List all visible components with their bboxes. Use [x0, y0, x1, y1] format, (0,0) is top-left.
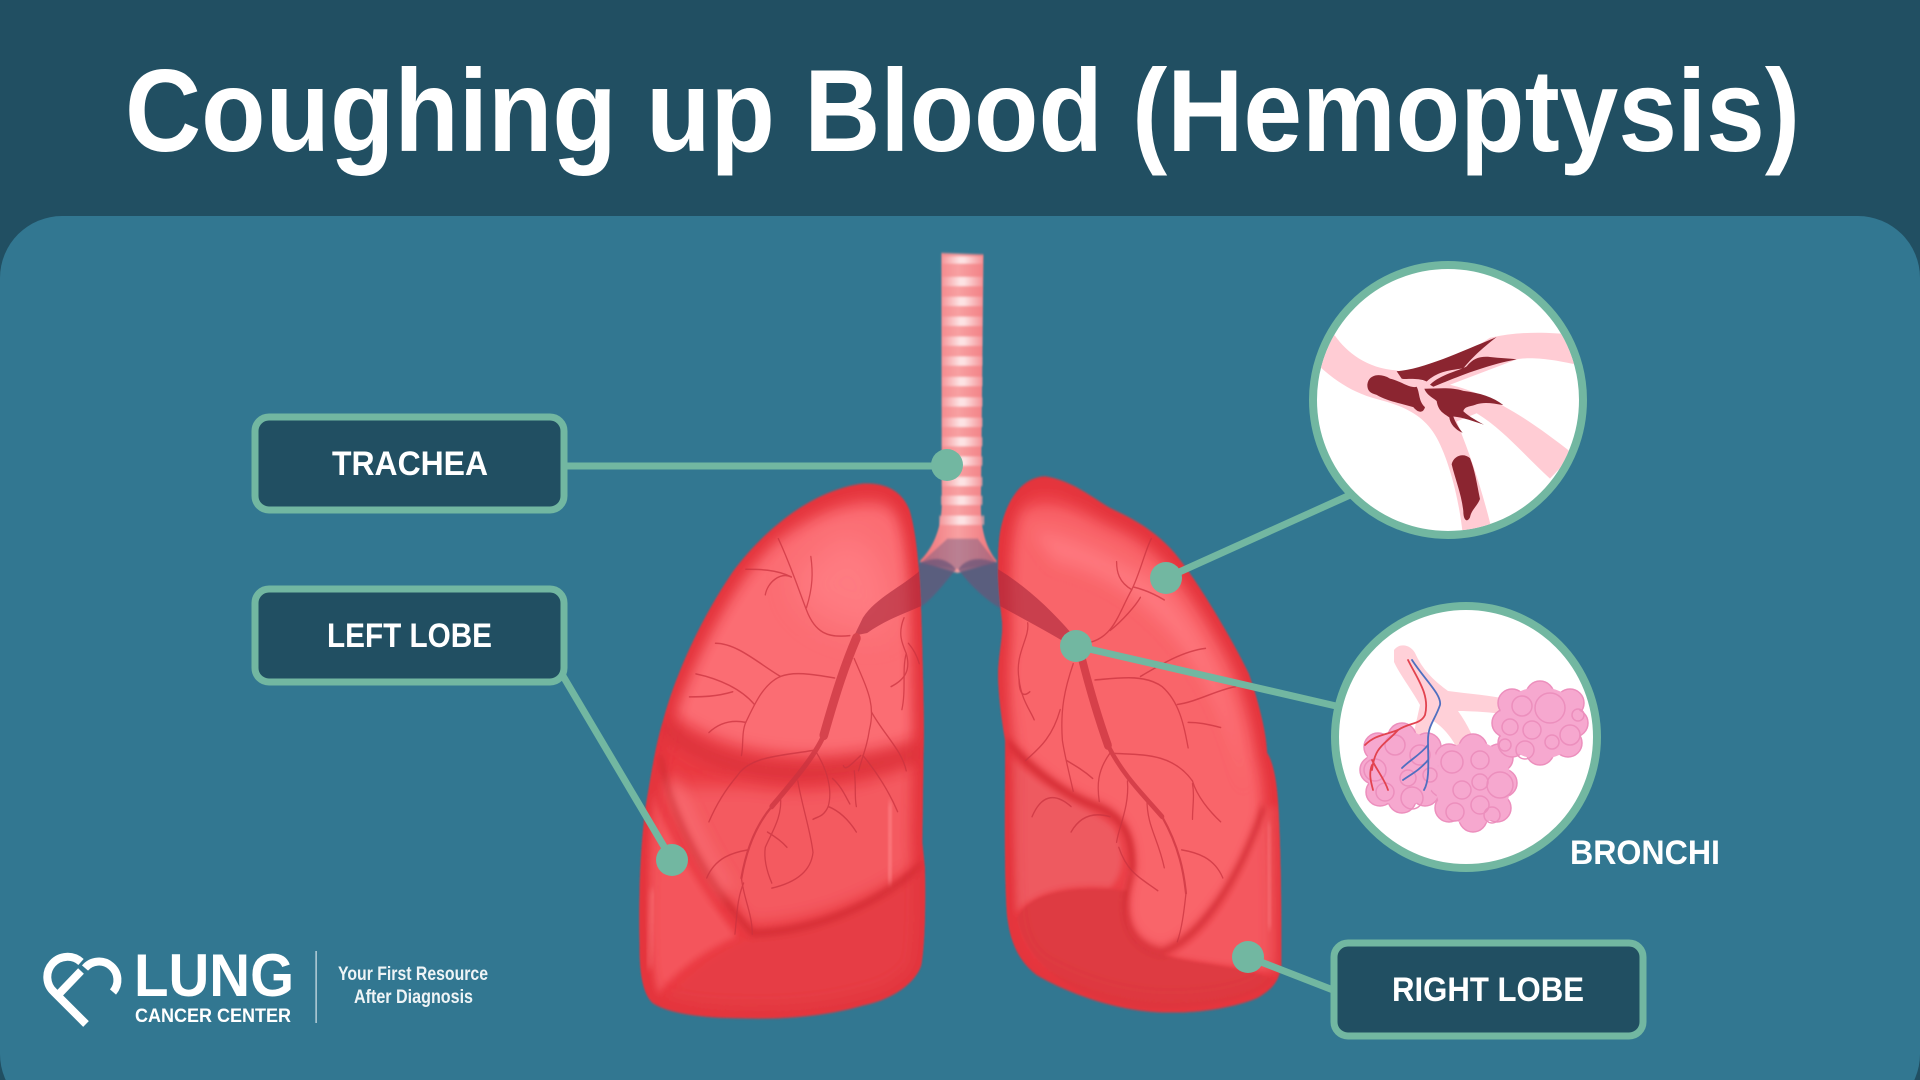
blue vein	[1402, 660, 1440, 790]
airway tubes	[1321, 332, 1574, 530]
logo tagline: Your First Resource	[338, 964, 488, 985]
label: left lobe	[255, 589, 564, 682]
label: right lobe: RIGHT LOBE	[1392, 971, 1584, 1009]
left lung	[639, 483, 925, 1019]
red vein	[1365, 660, 1426, 790]
left bronchi tree	[689, 539, 924, 934]
label: left lobe: LEFT LOBE	[327, 617, 492, 655]
right bronchi tree	[998, 539, 1236, 942]
bronchiole tube	[1394, 645, 1499, 746]
logo tagline: After Diagnosis	[354, 987, 473, 1008]
illustration: lungs and trachea	[639, 253, 1281, 1019]
connector line: trachea	[566, 462, 947, 470]
logo divider	[316, 951, 317, 1023]
right lung	[998, 476, 1281, 1013]
connector line: right lobe	[1248, 957, 1333, 990]
icon: heart ribbon	[47, 957, 117, 1024]
connector line: lower bronchi circle	[1076, 646, 1336, 706]
label: trachea	[255, 417, 564, 510]
logo wordmark: LUNG	[134, 942, 294, 1009]
alveoli clusters	[1360, 681, 1588, 832]
connector line: left lobe	[563, 676, 672, 860]
logo tagline	[338, 964, 488, 1008]
callout circle: blood clots in bronchi	[1313, 265, 1583, 540]
logo subtitle: CANCER CENTER	[135, 1006, 291, 1027]
label: bronchi: BRONCHI	[1570, 834, 1720, 872]
connector line: upper bronchi circle	[1166, 495, 1350, 578]
label: right lobe	[1334, 943, 1643, 1036]
trachea	[919, 253, 997, 573]
bronchus fork outside lungs	[906, 559, 1004, 610]
clots	[1367, 337, 1517, 520]
connector dots	[656, 449, 1264, 973]
main panel	[0, 216, 1920, 1080]
logo: Lung Cancer Center	[47, 942, 488, 1027]
callout circle: alveoli	[1335, 606, 1597, 868]
label: trachea: TRACHEA	[332, 445, 488, 483]
